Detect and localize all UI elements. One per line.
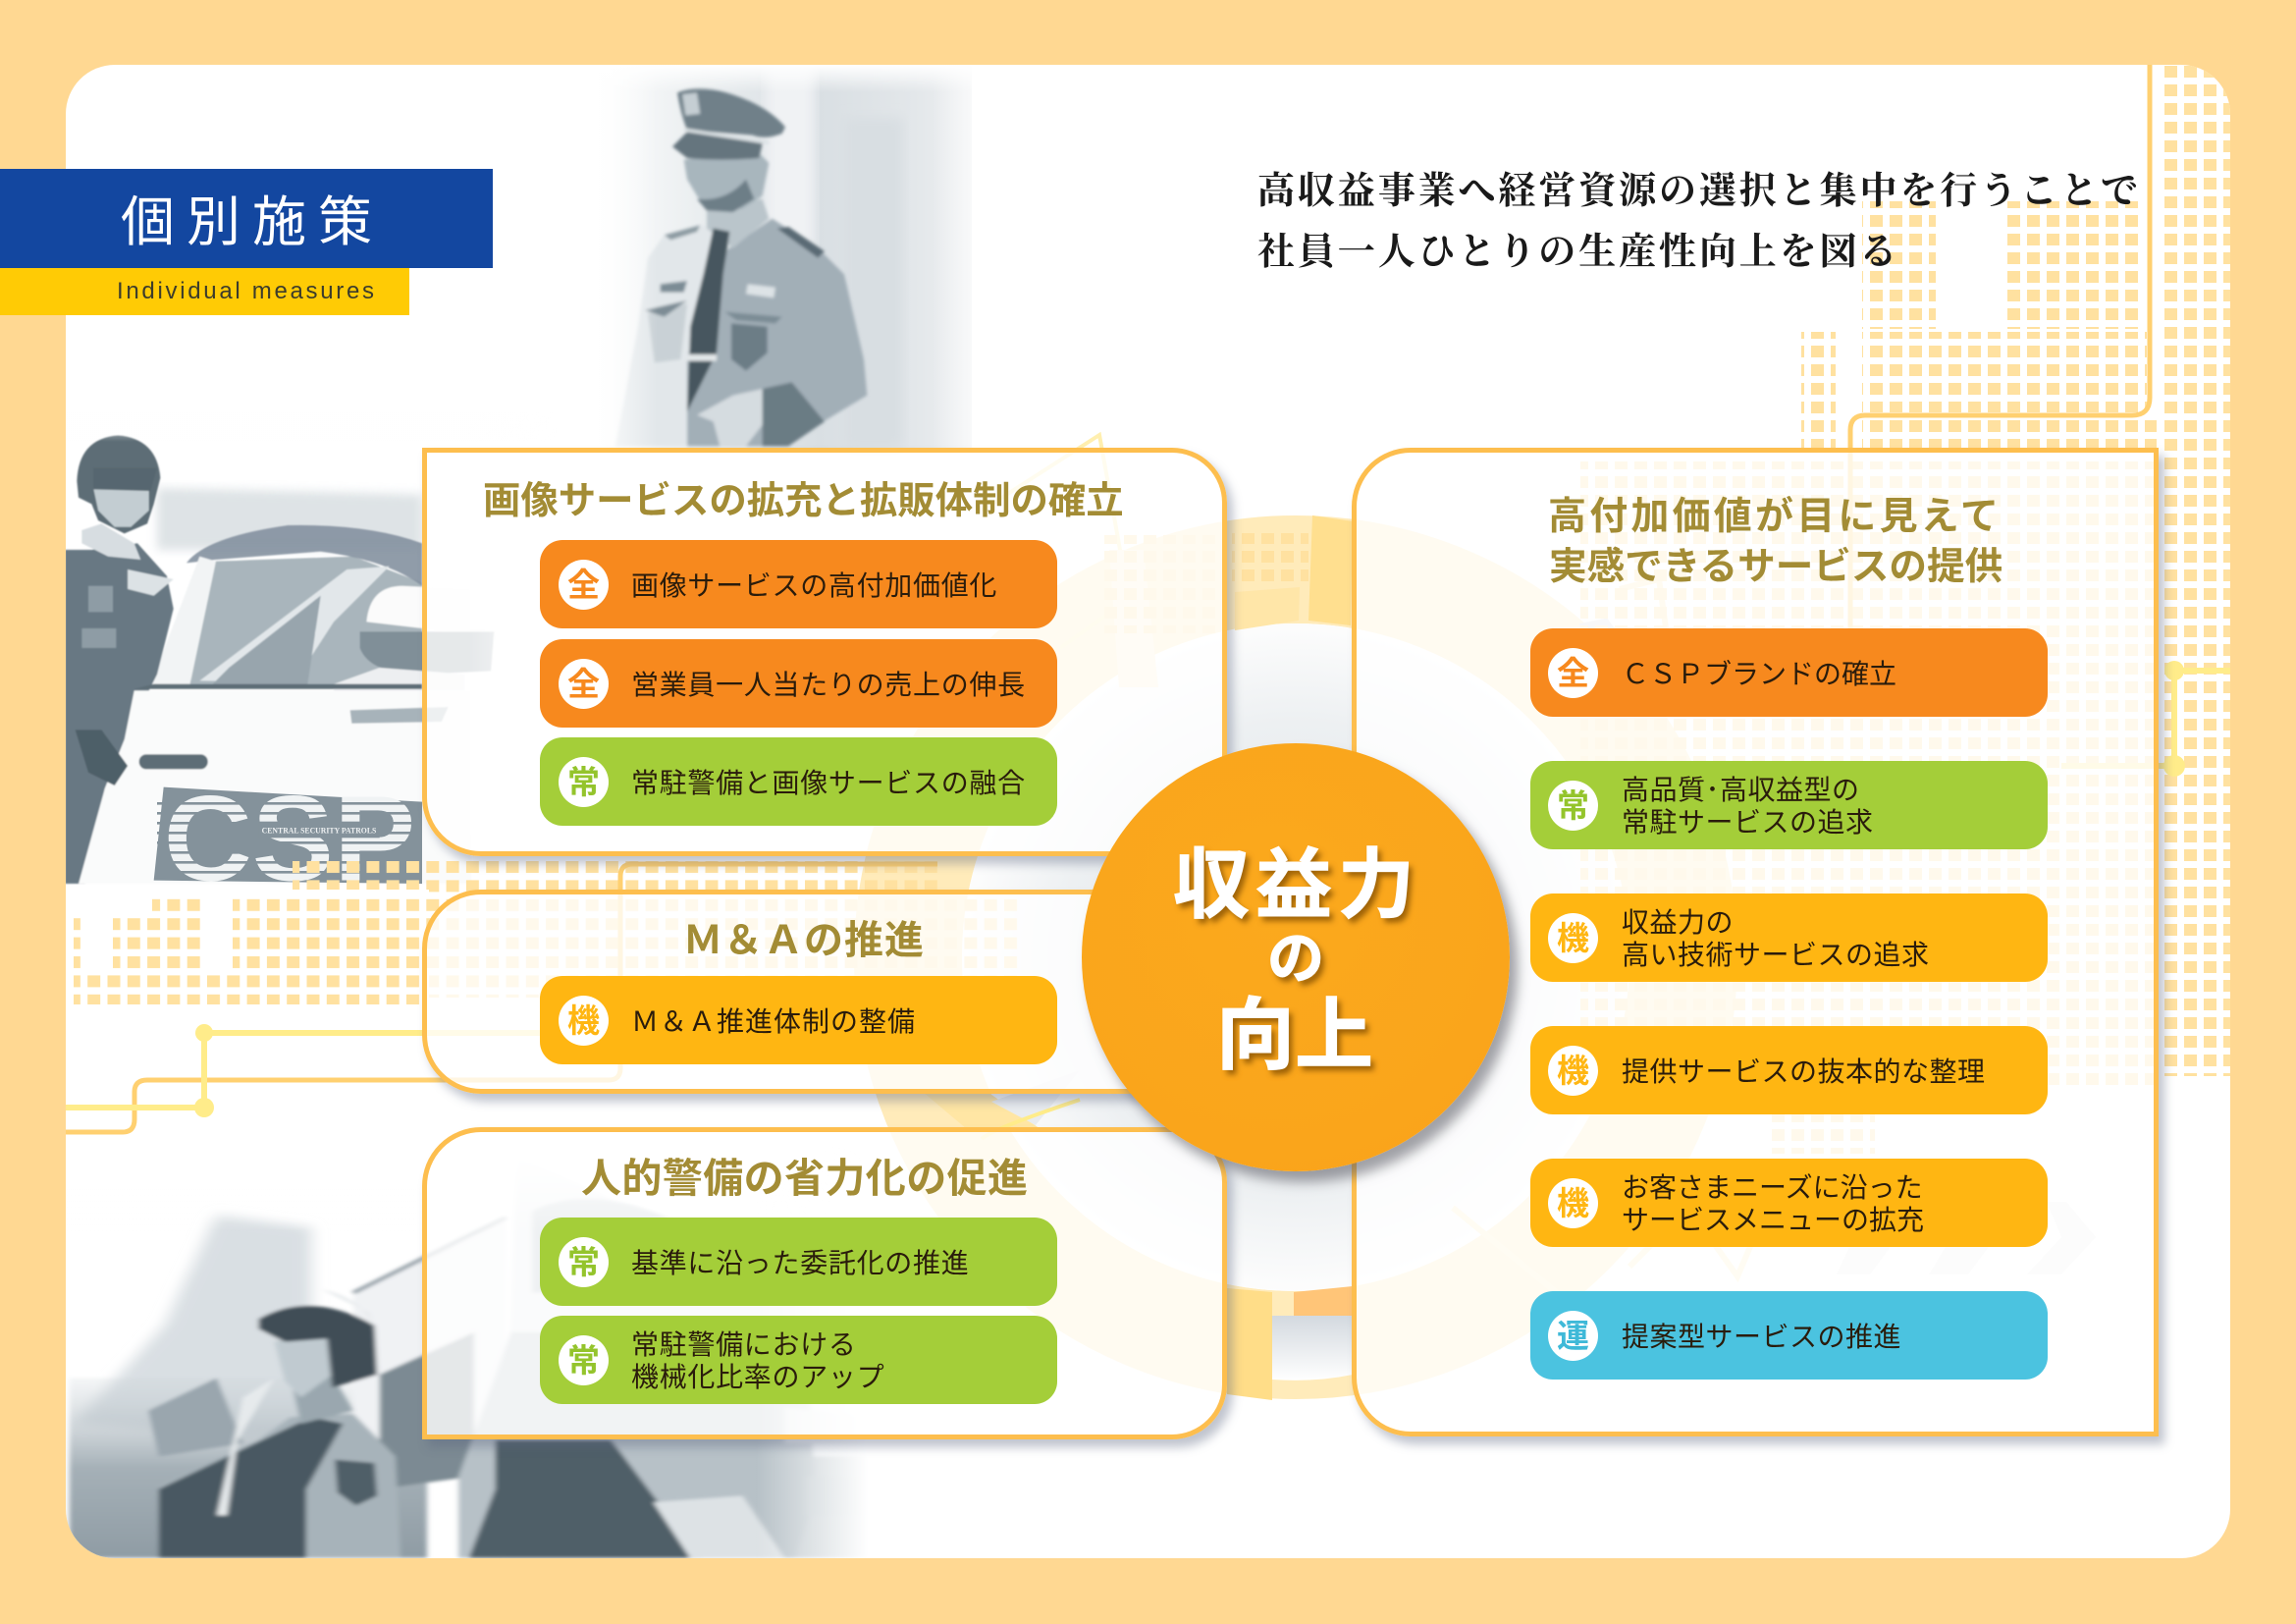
item: guard and image fusion: 常 [567,764,600,799]
item: mechanization: 常 [567,1341,600,1379]
item: guard and image fusion [540,737,1057,826]
headline [1257,171,2141,273]
center text line 3: 向上 [1216,992,1373,1079]
photo: two guards on the street [66,1144,883,1558]
panel: high value services [1352,448,2159,1436]
center text line 2: の [1267,927,1324,991]
circuit lines [66,65,2230,1132]
item: service menu [1530,1159,2048,1247]
heading: labor saving: 人的警備の省力化の促進 [581,1156,1028,1201]
photo: guard and patrol car: CENTRAL SECURITY PATROLS [262,825,376,835]
item: high quality guard: 高品質･高収益型の [1622,775,1860,805]
blue title bar [0,169,493,268]
photo: guard and patrol car: CSP [164,772,415,907]
item: M&A structure: 機 [567,1001,600,1039]
background ring [908,435,1767,1400]
item: sales per employee: 営業員一人当たりの売上の伸長 [631,670,1026,699]
center text line 1: 収益力 [1173,841,1420,928]
item: outsourcing: 基準に沿った委託化の推進 [631,1247,969,1278]
subtitle text: Individual measures [117,278,377,304]
item: tech services: 収益力の [1622,907,1734,938]
item: outsourcing [540,1218,1057,1306]
dot pattern: right side [1099,65,2230,1154]
item: service menu: 機 [1557,1184,1589,1221]
item: tech services: 高い技術サービスの追求 [1622,940,1930,970]
item: mechanization: 機械化比率のアップ [631,1362,884,1392]
heading: high value line 1: 高付加価値が目に見えて [1548,496,2002,538]
headline: 高収益事業へ経営資源の選択と集中を行うことで [1257,171,2141,212]
item: sales per employee: 全 [567,666,600,701]
item: CSP brand [1530,628,2048,717]
item: proposal services [1530,1291,2048,1380]
item: service menu: お客さまニーズに沿った [1622,1172,1923,1203]
center circle [1082,743,1510,1171]
headline: 社員一人ひとりの生産性向上を図る [1257,232,1899,273]
photo: guard and patrol car [66,434,494,885]
item: service review: 機 [1557,1053,1589,1088]
item: image service value [540,540,1057,628]
item: CSP brand: 全 [1557,654,1589,691]
panel: M&A [422,890,1227,1094]
title text: 個別施策 [121,191,384,252]
chevron arrows [1837,1202,2096,1274]
item: outsourcing: 常 [567,1243,600,1280]
panel: labor saving [422,1127,1227,1439]
item: tech services: 機 [1557,919,1589,956]
item: high quality guard [1530,761,2048,849]
title band [0,169,2183,1439]
item: mechanization: 常駐警備における [631,1329,857,1360]
item: image service value: 全 [567,566,600,603]
item: high quality guard: 常 [1557,787,1589,823]
item: service review: 提供サービスの抜本的な整理 [1622,1056,1986,1086]
item: high quality guard: 常駐サービスの追求 [1622,807,1874,838]
heading: high value line 2: 実感できるサービスの提供 [1549,546,2002,588]
item: CSP brand: ＣＳＰブランドの確立 [1622,658,1896,689]
item: tech services [1530,893,2048,982]
item: service review [1530,1026,2048,1114]
item: mechanization [540,1316,1057,1404]
item: proposal services: 提案型サービスの推進 [1622,1322,1901,1351]
item: M&A structure [540,976,1057,1064]
photo: guard with peaked cap [589,65,972,448]
heading: image services: 画像サービスの拡充と拡販体制の確立 [483,480,1124,522]
dot pattern: left side [74,859,1018,1004]
panel: image services [422,448,1227,856]
item: guard and image fusion: 常駐警備と画像サービスの融合 [631,768,1026,797]
item: M&A structure: Ｍ＆Ａ推進体制の整備 [631,1005,916,1037]
item: image service value: 画像サービスの高付加価値化 [631,569,997,601]
item: service menu: サービスメニューの拡充 [1622,1205,1924,1235]
item: sales per employee [540,639,1057,728]
item: proposal services: 運 [1557,1318,1589,1353]
heading: M&A: Ｍ＆Ａの推進 [683,919,925,962]
yellow subtitle bar [0,268,409,315]
